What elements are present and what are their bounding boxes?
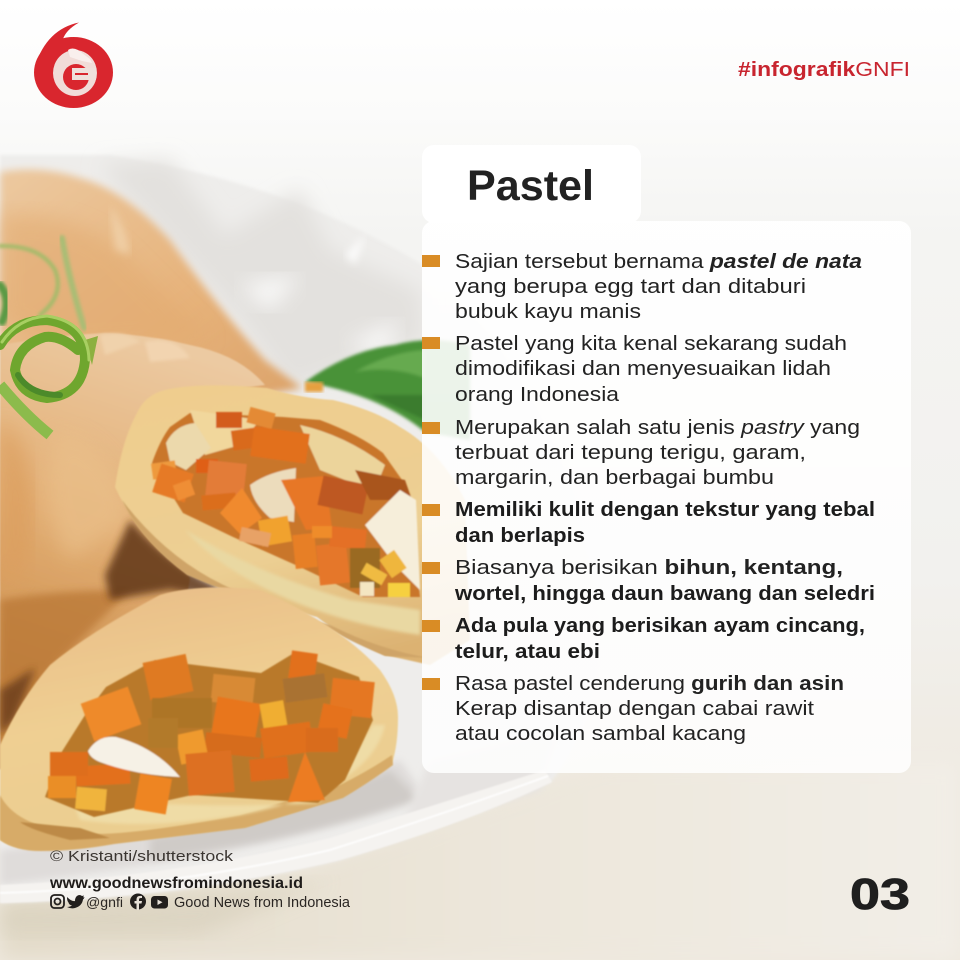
bullet item 1: yang berupa egg tart dan ditaburi: [455, 275, 806, 298]
title tab: Pastel: Pastel: [467, 162, 594, 210]
bullet item 2: [422, 332, 847, 406]
plate: [0, 155, 600, 903]
title tab: Pastel: [422, 145, 641, 223]
bullet item 7: Kerap disantap dengan cabai rawit: [455, 697, 814, 720]
bullet item 6: telur, atau ebi: [455, 641, 600, 663]
bullet item 5: wortel, hingga daun bawang dan seledri: [454, 583, 875, 605]
filling: [151, 407, 420, 597]
page number: 03: [850, 870, 910, 919]
bullet item 2: orang Indonesia: [455, 383, 620, 406]
bullet item 5: [422, 556, 875, 605]
icon: facebook: [130, 894, 146, 910]
bullet item 7: atau cocolan sambal kacang: [455, 722, 746, 745]
bullet item 6: Ada pula yang berisikan ayam cincang,: [455, 615, 865, 637]
plate rim: [0, 770, 552, 903]
icon: twitter: [67, 895, 84, 908]
bullet item 4: Memiliki kulit dengan tekstur yang tebal: [455, 499, 875, 521]
filling: [45, 650, 375, 817]
hashtag: #infografik GNFI: [738, 59, 910, 81]
photo credit: © Kristanti/shutterstock: [50, 848, 234, 865]
icon: instagram: [51, 895, 64, 908]
logo: [34, 22, 113, 108]
content panel: [422, 221, 911, 773]
bullet item 5: Biasanya berisikan bihun, kentang,: [455, 556, 843, 579]
bullet item 7: [422, 672, 844, 745]
bullet item 2: dimodifikasi dan menyesuaikan lidah: [455, 357, 831, 380]
bullet item 2: Pastel yang kita kenal sekarang sudah: [455, 332, 847, 355]
table surface: [0, 760, 960, 960]
bullet item 4: [422, 499, 875, 547]
bullet item 3: Merupakan salah satu jenis pastry yang: [455, 416, 860, 439]
bullet item 3: [422, 416, 860, 489]
handle: @gnfi: [86, 894, 123, 910]
website url: www.goodnewsfromindonesia.id: [49, 875, 303, 892]
green leaf: [305, 340, 470, 440]
social row: [51, 894, 351, 911]
shadow between pastries: [105, 520, 225, 600]
middle pastry: [115, 385, 470, 665]
bullet item 7: Rasa pastel cenderung gurih dan asin: [455, 672, 844, 695]
bullet item 3: margarin, dan berbagai bumbu: [455, 466, 774, 489]
bullet item 4: dan berlapis: [455, 525, 585, 547]
bullet item 6: [422, 615, 865, 663]
crust: [0, 587, 398, 850]
bullet item 1: Sajian tersebut bernama pastel de nata: [455, 250, 862, 273]
page name: Good News from Indonesia: [174, 894, 351, 911]
left pastry: [0, 333, 265, 770]
bullet item 1: bubuk kayu manis: [455, 300, 641, 323]
bullet item 1: [422, 250, 862, 323]
green onion curl: [0, 238, 98, 435]
icon: youtube: [151, 896, 168, 908]
bullet item 3: terbuat dari tepung terigu, garam,: [455, 441, 806, 464]
crust: [115, 385, 470, 665]
back pastry: [0, 170, 302, 400]
bottom pastry: [0, 587, 398, 851]
